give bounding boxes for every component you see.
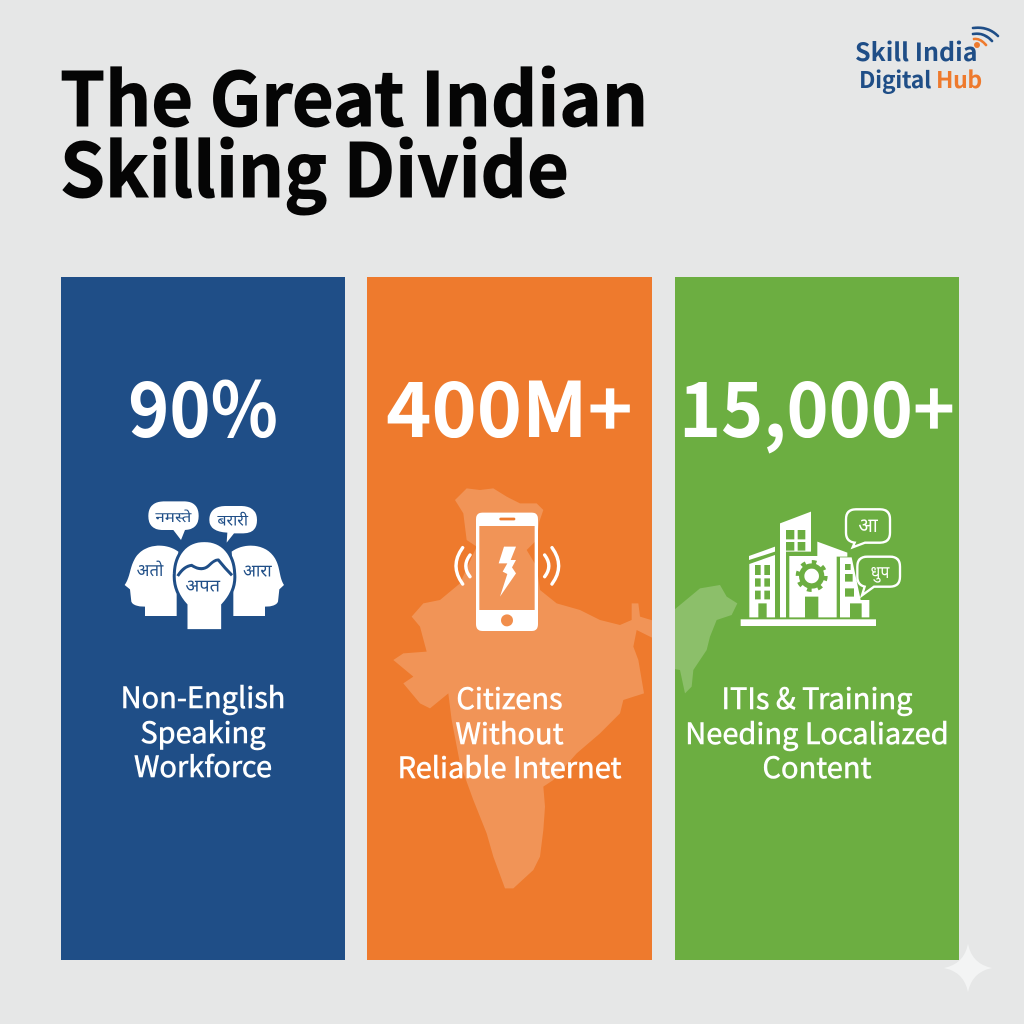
icon: three heads with speech bubbles: बरारी — [217, 508, 249, 530]
right building — [817, 542, 869, 617]
icon: three heads with speech bubbles: नमस्ते — [155, 507, 193, 527]
lightning bolt — [499, 547, 516, 597]
signal waves — [456, 548, 559, 584]
label — [121, 675, 285, 786]
stat: 15,000+: 15,000+ — [679, 349, 955, 459]
speech bubble: left — [148, 501, 199, 540]
speech bubble: lower — [857, 557, 900, 595]
label: Needing Localiazed — [685, 710, 949, 752]
phone — [476, 513, 538, 631]
label: Citizens — [456, 676, 563, 718]
label: Speaking — [140, 710, 266, 752]
base — [741, 619, 876, 626]
label: Content — [763, 745, 871, 787]
title — [60, 41, 648, 219]
icon: training buildings with speech bubbles — [740, 508, 902, 626]
panel: ITIs and training needing localized content — [675, 277, 959, 960]
center tower — [780, 512, 811, 617]
logo wordmark: Skill India — [855, 33, 977, 69]
label — [685, 676, 949, 787]
icon: sparkle — [945, 945, 991, 991]
icon: smartphone with signal — [454, 512, 560, 631]
speech bubble: upper — [846, 509, 890, 547]
icon: three heads with speech bubbles: अपत — [185, 571, 221, 596]
speech bubble: right — [209, 506, 257, 543]
icon: three heads with speech bubbles: अतो — [137, 556, 164, 581]
label: Reliable Internet — [398, 745, 621, 787]
map of India, orange portion — [394, 488, 652, 888]
title: The Great Indian — [60, 41, 648, 148]
label: Without — [455, 710, 564, 752]
logo: Skill India Digital Hub — [855, 26, 1000, 95]
icon: wifi signal — [972, 26, 1000, 48]
stat: 90%: 90% — [128, 349, 278, 459]
label — [398, 676, 622, 787]
speech bubble: lower: धुप — [871, 558, 890, 583]
label: Non-English — [121, 675, 285, 717]
title: Skilling Divide — [60, 112, 569, 219]
speech bubble: upper: आ — [858, 509, 878, 538]
logo wordmark — [855, 33, 982, 95]
panel: citizens without reliable internet — [367, 277, 652, 960]
label: ITIs & Training — [722, 676, 912, 718]
logo wordmark: Digital Hub — [859, 61, 982, 95]
left head — [125, 546, 178, 616]
panel: non-English speaking workforce — [61, 277, 345, 960]
map of India, green portion — [675, 585, 738, 694]
gear — [802, 566, 822, 586]
label: Workforce — [134, 744, 272, 786]
icon: three heads with speech bubbles — [124, 501, 284, 630]
left building — [749, 547, 775, 617]
right head — [232, 546, 284, 616]
icon: three heads with speech bubbles: आरा — [243, 557, 272, 582]
center block — [789, 556, 837, 617]
stat: 400M+: 400M+ — [386, 349, 633, 459]
center head — [174, 541, 235, 631]
